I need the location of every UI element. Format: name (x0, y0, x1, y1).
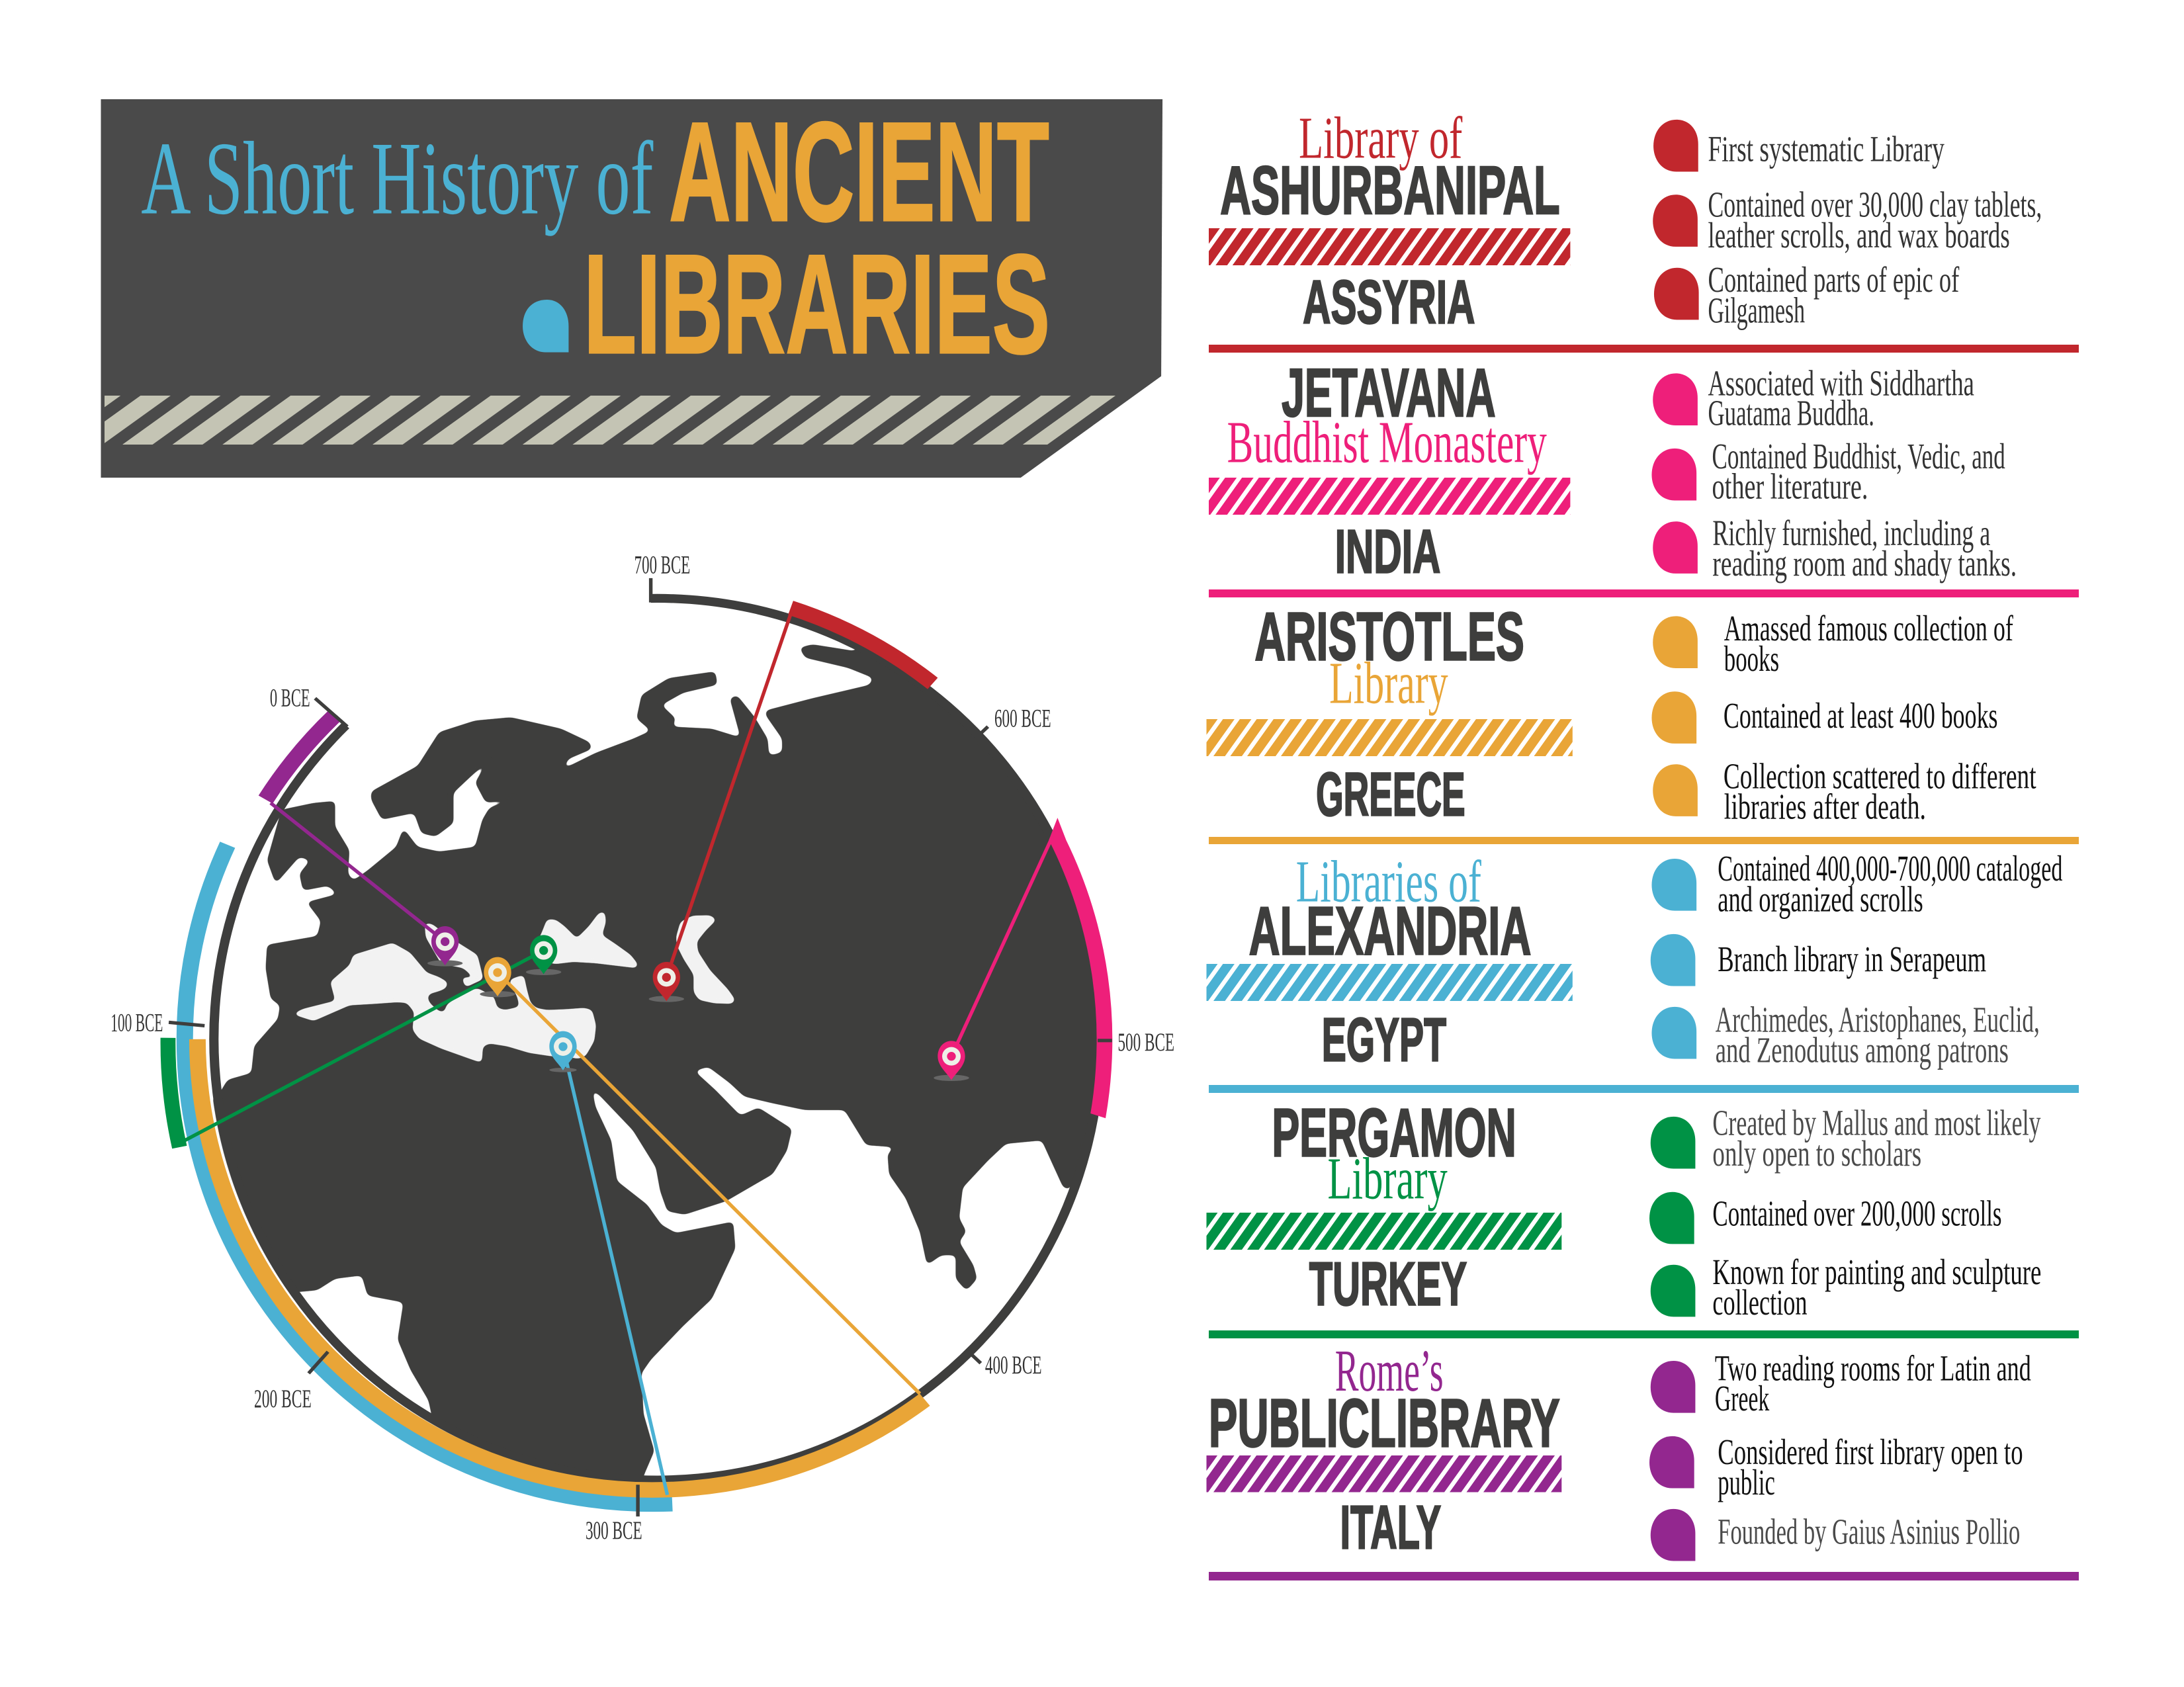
connector: orange (498, 973, 920, 1394)
fact (1708, 363, 1974, 433)
globe drawing (110, 550, 1174, 1545)
bullet icon (1653, 764, 1698, 816)
section text (1209, 1338, 2031, 1561)
label: 0 bce: 0 BCE (270, 683, 310, 712)
banner stripe (105, 396, 1115, 445)
label: 500 bce: 500 BCE (1117, 1027, 1174, 1057)
bullet icon (1651, 691, 1696, 744)
connector: purple (271, 803, 445, 941)
label: 700 bce: 700 BCE (634, 550, 690, 579)
stripe bar (1207, 1213, 1561, 1250)
tick: 200 bce (308, 1352, 328, 1373)
rule (1209, 1572, 2079, 1580)
bullet icon (1651, 1265, 1695, 1317)
bullet icon (1653, 616, 1698, 668)
connector: green (185, 951, 544, 1141)
section text: PERGAMON (1272, 1095, 1516, 1171)
sea: caspian (676, 915, 736, 1004)
section text: ARISTOTLES (1254, 599, 1524, 675)
connector: pink (951, 837, 1053, 1057)
section text: Library (1329, 650, 1448, 716)
sea: black sea (531, 911, 638, 968)
connector: red (666, 610, 792, 977)
pin: blue alexandria (549, 1031, 577, 1072)
fact (1715, 1348, 2031, 1418)
fact (1712, 436, 2005, 506)
panel: jetavana (1209, 355, 2079, 597)
label: 200 bce: 200 BCE (254, 1384, 312, 1413)
bullet icon (1651, 1361, 1695, 1413)
stripe bar (1207, 1455, 1561, 1492)
banner background (101, 99, 1162, 478)
section text: Libraries of (1296, 849, 1481, 914)
rule (1209, 1085, 2079, 1093)
pin: orange aristotle (480, 957, 515, 997)
fact (1718, 848, 2062, 920)
band: orange aristotle (197, 1039, 925, 1490)
bullet icon (1651, 1509, 1695, 1561)
band: purple rome (265, 715, 335, 800)
label: 100 bce: 100 BCE (110, 1008, 163, 1037)
section text: TURKEY (1309, 1250, 1467, 1318)
fact (1712, 1102, 2041, 1174)
bullet icon (1653, 120, 1698, 171)
band: green pergamon (168, 1038, 179, 1147)
fact (1718, 1432, 2023, 1502)
tick: 700 bce (649, 578, 652, 603)
fact (1708, 259, 1960, 330)
fact: public (1718, 1462, 1775, 1502)
stripe bar (1207, 719, 1573, 756)
fact: Greek (1715, 1378, 1770, 1418)
section text (1249, 848, 2062, 1074)
sea: mediterranean (292, 943, 596, 1063)
fact (1724, 608, 2013, 679)
bullet icon (1651, 1117, 1695, 1168)
panel: title banner (101, 93, 1162, 478)
section text: ITALY (1340, 1493, 1441, 1561)
rule (1209, 589, 2079, 597)
seas and pins (185, 610, 1053, 1495)
icon: blue drop (523, 300, 568, 353)
section text: Buddhist Monastery (1227, 410, 1547, 475)
pin: pink jetavana (934, 1041, 969, 1081)
fact: other literature. (1712, 466, 1868, 506)
bullet icon (1651, 859, 1696, 911)
bullet icon (1654, 268, 1699, 320)
tick: 100 bce (169, 1022, 204, 1025)
connector: blue (563, 1047, 668, 1495)
section text: JETAVANA (1282, 355, 1496, 431)
band: pink jetavana (1049, 818, 1112, 1118)
stripe bar (1207, 964, 1573, 1001)
section text (1272, 1095, 2041, 1322)
section text: ALEXANDRIA (1249, 892, 1531, 969)
fact (1724, 756, 2036, 826)
fact: books (1724, 638, 1779, 679)
label: 400 bce: 400 BCE (985, 1350, 1042, 1379)
title text (141, 93, 1050, 383)
section text: GREECE (1316, 760, 1465, 828)
bullet icon (1653, 521, 1698, 574)
bullet icon (1651, 934, 1695, 986)
tick: 600 bce (979, 726, 988, 736)
bullet icon (1653, 195, 1698, 247)
section text: Rome’s (1335, 1338, 1444, 1403)
stripe bar (1209, 228, 1570, 265)
fact (1716, 999, 2040, 1070)
bullet icon (1651, 1007, 1696, 1059)
tick: 300 bce (636, 1485, 640, 1516)
fact: collection (1712, 1282, 1808, 1322)
section text: Library of (1299, 105, 1463, 171)
fact: Gilgamesh (1708, 290, 1805, 330)
section text: Library (1327, 1146, 1448, 1211)
fact (1712, 513, 2017, 584)
ring: timeline arc (214, 598, 1100, 1480)
panel: pergamon library (1207, 1095, 2079, 1338)
rule (1209, 837, 2079, 844)
pin: green pergamon (526, 935, 561, 975)
bullet icon (1649, 1436, 1694, 1489)
panel: library of ashurbanipal (1209, 105, 2079, 353)
section text: PUBLICLIBRARY (1209, 1385, 1560, 1461)
section text (1227, 355, 2017, 585)
fact (1708, 184, 2042, 255)
rule (1209, 345, 2079, 353)
panel: globe timeline (110, 550, 1174, 1545)
pin: purple rome (427, 926, 462, 967)
section text: ASSYRIA (1303, 268, 1475, 336)
panel: rome public library (1207, 1338, 2079, 1580)
tick: 400 bce (969, 1352, 981, 1363)
rule (1209, 1330, 2079, 1338)
bullet icon (1649, 1192, 1694, 1244)
tick: 0 bce (315, 699, 347, 726)
section text: INDIA (1335, 517, 1440, 585)
sea: adriatic (425, 923, 484, 988)
bullet icon (1653, 373, 1698, 425)
fact: Guatama Buddha. (1708, 392, 1874, 433)
label: 300 bce: 300 BCE (586, 1516, 642, 1545)
pin: red ashurbanipal (649, 962, 684, 1002)
panel: aristotles library (1207, 599, 2079, 844)
panel: libraries of alexandria (1207, 848, 2079, 1093)
section text: ASHURBANIPAL (1220, 152, 1560, 229)
stripe bar (1209, 478, 1570, 515)
section text (1254, 599, 2036, 828)
bullet icon (1651, 449, 1696, 500)
section text (1220, 105, 2042, 336)
label: 600 bce: 600 BCE (994, 703, 1051, 732)
tick: 500 bce (1098, 1039, 1112, 1042)
fact (1712, 1252, 2041, 1322)
band: blue alexandria (185, 845, 672, 1504)
section text: EGYPT (1322, 1006, 1446, 1074)
band: red ashurbanipal (791, 608, 933, 683)
landmass (212, 644, 1097, 1480)
